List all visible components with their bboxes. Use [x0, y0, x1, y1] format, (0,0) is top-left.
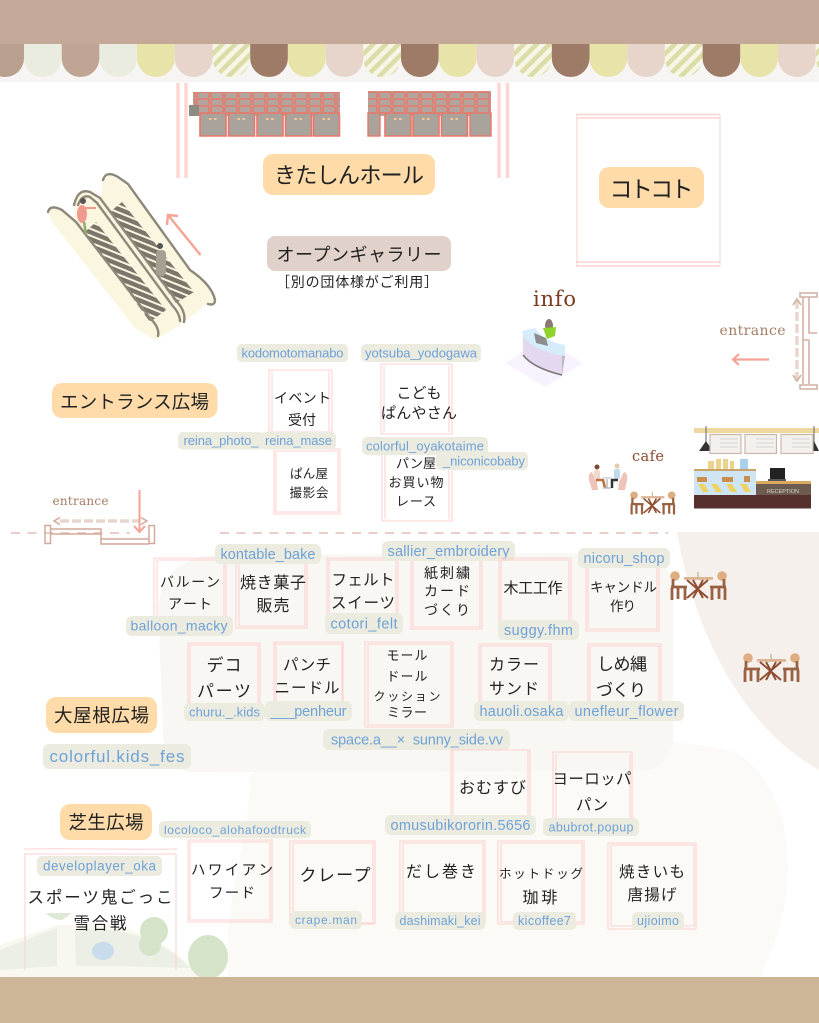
booth: color sand — [479, 644, 551, 710]
booth: color sand: カラー — [489, 657, 539, 674]
booth: paper embroidery cards: 紙刺繍 — [424, 565, 470, 581]
awning — [0, 0, 819, 82]
tag: hauoli.osaka: hauoli.osaka — [480, 704, 564, 720]
tag: locoloco_alohafoodtruck: locoloco_alohafoodtruck — [164, 823, 307, 837]
arrow: right entrance — [733, 354, 769, 365]
booth: candle making: キャンドル — [590, 580, 657, 595]
booth: crepes: クレープ — [300, 866, 370, 885]
booth: deco parts: デコ — [206, 655, 242, 675]
tag: kicoffee7 — [513, 912, 576, 930]
booth: paper embroidery cards: づくり — [424, 602, 470, 618]
booth: sports tag and snowball fight: 雪合戦 — [74, 914, 127, 933]
background: lawn area — [227, 738, 788, 977]
seats: right block — [368, 91, 491, 136]
arrow: left entrance — [134, 490, 145, 532]
arrow: escalator direction — [167, 215, 200, 255]
background: beige curved area — [677, 532, 819, 770]
tag: balloon_macky: balloon_macky — [130, 618, 228, 634]
heading: Kitashin Hall: きたしんホール — [274, 163, 424, 188]
tag: abubrot.popup — [543, 818, 639, 836]
tag: reina_mase: reina_mase — [265, 433, 332, 448]
booth: event reception: イベント — [274, 390, 331, 406]
booth: punch needle: ニードル — [274, 680, 340, 697]
booth: baked sweet potato and karaage — [608, 843, 696, 929]
booth: event reception — [269, 370, 332, 432]
hall wall right — [499, 83, 508, 178]
tag: crape.man: crape.man — [295, 913, 357, 927]
booth: shimenawa making — [588, 644, 661, 710]
heading: Entrance plaza: エントランス広場 — [60, 392, 209, 412]
background: roof plaza area — [158, 553, 673, 772]
heading: Open Gallery — [267, 236, 451, 271]
tag: developlayer_oka — [37, 856, 162, 876]
heading: Open Gallery: オープンギャラリー — [276, 245, 442, 265]
booth: rice balls — [451, 750, 530, 818]
booth: shimenawa making: づくり — [596, 681, 646, 700]
booth: woodworking: 木工工作 — [504, 580, 562, 597]
booth: European bread: ヨーロッパ — [552, 771, 632, 788]
heading: Large roof plaza — [46, 697, 157, 733]
booth: balloon art: バルーン — [160, 574, 220, 590]
booth: felt sweets — [327, 558, 398, 630]
booth: felt sweets: フェルト — [332, 572, 394, 589]
heading: Kotokoto — [599, 167, 704, 208]
tag: _niconicobaby: _niconicobaby — [442, 454, 526, 468]
tag: colorful.kids_fes — [43, 744, 191, 769]
tag: ___penheur — [265, 701, 352, 721]
tag: reina_photo_: reina_photo_ — [184, 433, 259, 448]
tag: omusubikororin.5656: omusubikororin.5656 — [390, 818, 530, 834]
tag: space.a__ and sunny_side.vv: space.a__× sunny_side.vv — [331, 732, 504, 748]
booth: baked sweet potato and karaage: 唐揚げ — [628, 886, 677, 904]
booth: baked sweets: 販売 — [256, 597, 290, 615]
footer band — [0, 977, 819, 1023]
booth: Hawaiian food: フード — [209, 886, 255, 902]
booth: punch needle: パンチ — [283, 657, 331, 674]
heading: Kotokoto: コトコト — [610, 176, 694, 202]
tag: churu._.kids: churu._.kids — [189, 704, 260, 720]
tag: ujioimo: ujioimo — [637, 914, 679, 928]
booth: dashimaki — [400, 841, 485, 924]
tag: yotsuba_yodogawa: yotsuba_yodogawa — [365, 346, 478, 360]
booth: felt sweets: スイーツ — [331, 595, 395, 612]
booth: sports tag and snowball fight — [24, 849, 178, 970]
dashed boundary line — [11, 532, 668, 534]
booth: bakery shopping race — [382, 452, 452, 521]
icon: cafe table — [630, 491, 675, 514]
icon: cafe counter: RECEPTION — [767, 489, 799, 495]
booth: sports tag and snowball fight: スポーツ鬼ごっこ — [28, 888, 172, 907]
booth: candle making — [586, 560, 659, 631]
booth: deco parts — [188, 643, 260, 710]
tag: crape.man — [290, 911, 362, 929]
tag: suggy.fhm — [498, 620, 579, 640]
booth: hot dogs and coffee: ホットドッグ — [499, 867, 583, 881]
booth: European bread — [552, 752, 632, 820]
booth: baked sweets: 焼き菓子 — [240, 574, 306, 592]
tag: abubrot.popup: abubrot.popup — [548, 820, 634, 834]
booth: mall doll cushion mirror: ドール — [386, 669, 428, 684]
heading: Lawn plaza: 芝生広場 — [68, 812, 144, 833]
booth: shimenawa making: しめ縄 — [597, 655, 647, 674]
tag: suggy.fhm: suggy.fhm — [504, 623, 573, 639]
booth: bakery photo session: 撮影会 — [290, 485, 329, 500]
tag: ujioimo — [632, 912, 684, 930]
booth: Hawaiian food — [188, 840, 273, 922]
heading: Entrance plaza — [52, 383, 218, 418]
booth: baked sweet potato and karaage: 焼きいも — [619, 863, 685, 881]
icon: right entrance door — [793, 293, 817, 389]
booth: bakery photo session — [274, 449, 340, 514]
booth: bakery photo session: ぱん屋 — [290, 467, 328, 481]
tag: dashimaki_kei: dashimaki_kei — [400, 914, 480, 928]
booth: kids bakery: ぱんやさん — [381, 405, 457, 422]
tag: ___penheur: ___penheur — [270, 704, 347, 720]
booth: hot dogs and coffee: 珈琲 — [522, 889, 558, 907]
icon: escalator — [48, 174, 215, 340]
tag: colorful.kids_fes: colorful.kids_fes — [50, 747, 184, 766]
booth: mall doll cushion mirror: ミラー — [387, 705, 427, 720]
booth: rice balls: おむすび — [459, 779, 526, 797]
tag: nicoru_shop: nicoru_shop — [584, 551, 664, 567]
label: left entrance: entrance — [52, 494, 108, 508]
tag: developlayer_oka: developlayer_oka — [43, 858, 156, 874]
booth: European bread: パン — [576, 797, 608, 814]
background: park with pond and trees — [0, 913, 228, 979]
booth: woodworking — [499, 558, 571, 630]
tag: cotori_felt: cotori_felt — [330, 616, 398, 632]
booth: kids bakery — [381, 364, 457, 434]
heading: Large roof plaza: 大屋根広場 — [54, 705, 149, 726]
tag: sallier_embroidery: sallier_embroidery — [388, 544, 510, 560]
booth: deco parts: パーツ — [197, 682, 251, 701]
hall wall left — [178, 83, 186, 178]
heading: info: info — [533, 287, 576, 311]
booth: balloon art — [154, 558, 226, 628]
booth: mall doll cushion mirror — [365, 642, 453, 727]
note: used by another group: ［別の団体様がご利用］ — [276, 274, 438, 290]
icon: cafe customers — [589, 464, 627, 490]
booth: Hawaiian food: ハワイアン — [191, 863, 273, 879]
icon: table 1 — [670, 571, 727, 600]
icon: table 2 — [743, 653, 800, 682]
tag: kontable_bake: kontable_bake — [220, 547, 316, 563]
room frame: Kotokoto — [576, 114, 720, 266]
icon: left entrance door — [45, 518, 154, 544]
booth: hot dogs and coffee — [498, 841, 584, 924]
booth: bakery shopping race: お買い物 — [388, 475, 444, 490]
tag: kicoffee7: kicoffee7 — [518, 914, 571, 928]
tag: kodomotomanabo: kodomotomanabo — [242, 346, 344, 360]
heading: cafe: cafe — [632, 449, 664, 465]
booth: color sand: サンド — [489, 681, 539, 698]
booth: mall doll cushion mirror: モール — [386, 648, 428, 663]
booth: bakery shopping race: レース — [396, 494, 436, 509]
booth: dashimaki: だし巻き — [406, 863, 476, 881]
tag: unefleur_flower: unefleur_flower — [574, 704, 679, 720]
heading: Kitashin Hall — [263, 154, 435, 195]
icon: cafe counter — [694, 426, 819, 508]
booth: event reception: 受付 — [288, 412, 316, 428]
booth: paper embroidery cards: カード — [424, 583, 470, 599]
seats: left block — [189, 92, 340, 136]
booth: bakery shopping race: パン屋 — [396, 456, 436, 471]
icon: info desk — [505, 319, 583, 387]
booth: paper embroidery cards — [411, 560, 482, 629]
booth: punch needle — [274, 642, 343, 705]
tag: cotori_felt — [325, 613, 403, 634]
booth: balloon art: アート — [168, 596, 212, 612]
booth: crepes — [290, 841, 375, 924]
label: right entrance: entrance — [720, 323, 786, 339]
booth: candle making: 作り — [610, 599, 636, 614]
booth: kids bakery: こども — [396, 385, 442, 402]
booth: baked sweets — [236, 560, 307, 628]
tag: colorful_oyakotaime: colorful_oyakotaime — [366, 438, 484, 454]
booth: mall doll cushion mirror: クッション — [374, 690, 440, 704]
heading: Lawn plaza — [60, 804, 152, 840]
